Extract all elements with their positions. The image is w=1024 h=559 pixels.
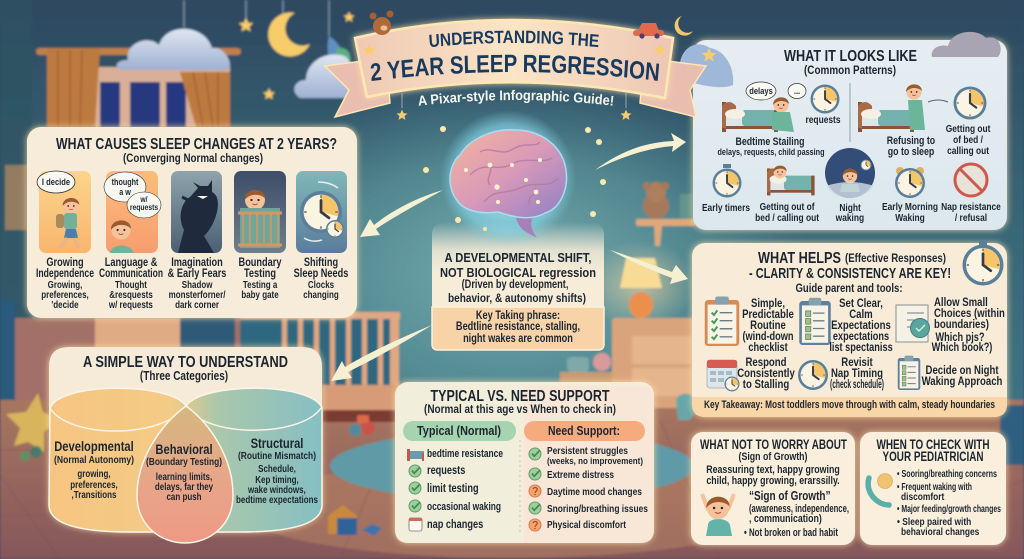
labels: Boundary [239, 257, 282, 269]
getting out of bed: Getting out of [760, 201, 815, 213]
small choices: boundaries) [934, 318, 989, 331]
structural: (Routine Mismatch) [238, 450, 316, 462]
respond consistently: Consistently [737, 367, 795, 380]
panel: what not to worry about: “Sign of Growth” [749, 490, 830, 503]
need support column [524, 421, 648, 531]
panel: what not to worry about: • Not broken or bad habit [744, 527, 838, 539]
typical column: bedtime resistance [427, 448, 503, 460]
panel: what not to worry about: (Sign of Growth) [739, 451, 807, 463]
panel: typical vs need support: TYPICAL VS. NEED SUPPORT [430, 388, 610, 405]
respond consistently [707, 356, 795, 392]
typical column [403, 421, 516, 531]
getting out of bed [755, 166, 820, 224]
title line one: UNDERSTANDING THE [429, 30, 599, 48]
bedtime stalling: ... [794, 85, 800, 96]
card: independence [37, 171, 91, 253]
icon: happy child [702, 494, 734, 536]
panel: simple way to understand: (Three Categories) [140, 370, 228, 383]
labels: w/ requests [108, 299, 153, 310]
star plush [6, 393, 60, 452]
hanging rocket [328, 36, 350, 62]
title line one [429, 30, 599, 48]
routine: Predictable [742, 308, 794, 321]
panel: brain center: night wakes are common [463, 333, 573, 345]
labels: dark corner [175, 299, 219, 310]
respond consistently: Respond [745, 356, 787, 369]
subtitle: A Pixar-style Infographic Guide! [418, 90, 614, 106]
nap timing: Nap Timing [831, 367, 883, 380]
panel: what not to worry about: , communication) [749, 513, 822, 525]
panel: what it looks like: (Common Patterns) [804, 63, 896, 77]
card: independence: I decide [42, 176, 70, 187]
panel: when to check with pediatrician: YOUR PEDIATRICIAN [882, 449, 984, 464]
small choices: Allow Small [934, 296, 988, 309]
heading: WHAT IT LOOKS LIKE [784, 48, 917, 65]
labels: preferences, [41, 289, 89, 300]
sparkles [423, 126, 606, 231]
structural: wake windows, [247, 484, 306, 495]
early timers [702, 164, 750, 214]
labels: Language & [105, 257, 158, 269]
night waking [825, 148, 875, 224]
labels: Testing a [243, 279, 278, 290]
rug [330, 430, 694, 502]
labels: 'decide [51, 299, 79, 310]
structural: Structural [251, 436, 303, 451]
icon: stopwatch [962, 240, 1004, 286]
labels: Sleep Needs [294, 268, 349, 280]
bedtime stalling: delays, requests, child passing [718, 147, 825, 158]
nap resistance: Nap resistance [941, 201, 1001, 213]
picture frame [5, 165, 27, 230]
panel: what not to worry about: (awareness, independence, [749, 503, 849, 515]
panel: what not to worry about: Reassuring text, happy growing [706, 464, 840, 476]
need support column: Need Support: [548, 423, 620, 438]
card: language: a w [119, 187, 131, 197]
small choices: Which pjs? [935, 332, 985, 344]
structural: Schedule, [258, 463, 296, 474]
cloud top right [932, 32, 1001, 57]
developmental [54, 439, 134, 500]
card: language: requests [130, 202, 158, 212]
cabinet behind [95, 318, 235, 348]
typical column: Typical (Normal) [417, 423, 501, 438]
behavioral: Behavioral [155, 442, 213, 457]
panel: brain center: Key Taking phrase: [476, 310, 560, 322]
developmental: Developmental [54, 439, 134, 454]
behavioral: can push [166, 491, 202, 502]
panel: what helps [692, 240, 1007, 417]
routine: (wind-down [742, 331, 794, 343]
window and curtains [36, 48, 241, 127]
labels: Clocks [308, 279, 334, 290]
refusing to go to sleep: Getting out [946, 123, 991, 135]
getting out of bed: bed / calling out [755, 212, 820, 224]
banner tails [325, 58, 390, 117]
labels: Communication [99, 268, 163, 280]
labels: Shifting [304, 257, 338, 269]
night waking: Night [839, 202, 862, 214]
labels: Shadow [182, 279, 213, 290]
structural [236, 436, 318, 506]
arrows from brain [331, 133, 688, 381]
night waking approach: Waking Approach [922, 375, 1002, 388]
panel: when to check with pediatrician: behavioral changes [901, 526, 979, 538]
shelf and teddy [636, 182, 696, 246]
toy shapes [349, 415, 375, 436]
panel: typical vs need support [395, 382, 654, 543]
small choices: Choices (within [934, 307, 1005, 320]
labels: & Early Fears [168, 268, 227, 280]
early timers: Early timers [702, 202, 750, 214]
bedtime stalling: Bedtime Stailing [736, 136, 804, 148]
toy blocks [328, 505, 382, 536]
typical column: occasional waking [427, 501, 501, 513]
venn left and right [49, 388, 322, 532]
refusing to go to sleep: calling out [947, 145, 990, 157]
bedtime stalling: requests [806, 114, 840, 126]
panel: brain center: NOT BIOLOGICAL regression [440, 266, 596, 280]
bedtime stalling: delays [749, 85, 773, 96]
labels: &resquests [109, 289, 153, 300]
routine: checklist [748, 342, 788, 354]
need support column: Persistent struggles [547, 445, 628, 457]
heading: WHAT CAUSES SLEEP CHANGES AT 2 YEARS? [56, 136, 337, 153]
brain icon [440, 110, 576, 246]
card: language [104, 171, 161, 253]
labels: changing [303, 289, 339, 300]
panel: typical vs need support: (Normal at this age vs When to check in) [424, 402, 616, 416]
nap timing: Revisit [841, 356, 873, 369]
need support column: Physical discomfort [547, 519, 626, 531]
panel: brain center: behavior, & autonomy shifts) [448, 293, 586, 305]
need support column: Daytime mood changes [547, 486, 642, 498]
card: boundary [234, 171, 286, 253]
routine [705, 297, 794, 354]
structural: Kep timing, [255, 474, 299, 485]
panel: what causes sleep changes [27, 127, 357, 318]
need support column: Extreme distress [547, 469, 614, 481]
refusing to go to sleep: Refusing to [887, 135, 935, 147]
panel: what not to worry about: WHAT NOT TO WORRY ABOUT [700, 437, 848, 452]
labels: Independence [36, 268, 94, 280]
nap resistance [941, 164, 1001, 224]
routine: Simple, [751, 297, 785, 310]
labels: monsterforner/ [169, 289, 226, 300]
behavioral: (Boundary Testing) [146, 456, 222, 468]
center panel fade [432, 222, 604, 350]
developmental: (Normal Autonomy) [54, 454, 134, 466]
small choices [896, 296, 1005, 354]
teddy on banner [370, 10, 394, 35]
night waking approach [898, 356, 1002, 390]
expectations [799, 297, 893, 354]
card: shifting needs [296, 171, 347, 253]
refusing to go to sleep: go to sleep [888, 146, 934, 158]
banner ribbon [355, 20, 673, 98]
typical column: limit testing [427, 483, 479, 495]
toy basket [560, 353, 612, 382]
cloud by banner [294, 55, 352, 98]
panel: what not to worry about: child, happy growing, erarssilly. [706, 475, 840, 487]
lamp and dresser [585, 240, 700, 420]
developmental: growing, [77, 468, 111, 479]
card: language: w/ [140, 194, 148, 204]
panel: brain center: (Driven by development, [462, 279, 568, 291]
panel: what not to worry about [691, 432, 855, 545]
expectations: Expectations [831, 319, 891, 332]
need support column: (weeks, no improvement) [547, 456, 643, 467]
card: fears [171, 171, 222, 253]
panel: what it looks like [680, 32, 1007, 230]
labels [36, 257, 349, 310]
respond consistently: to Stalling [743, 378, 789, 391]
balls [20, 446, 42, 461]
night waking approach: Decide on Night [926, 364, 999, 377]
behavioral: learning limits, [156, 471, 212, 482]
panel: when to check with pediatrician: • Frequent waking with [897, 482, 972, 493]
panel: what helps: (Effective Responses) [845, 251, 946, 265]
early morning waking [882, 167, 938, 224]
car on banner [633, 23, 664, 39]
routine: Routine [750, 319, 786, 332]
behavioral: delays, far they [155, 481, 213, 492]
typical column: nap changes [427, 519, 483, 531]
title banner [324, 10, 708, 120]
venn center egg [137, 406, 233, 543]
title line two: 2 YEAR SLEEP REGRESSION [370, 54, 660, 81]
nap timing [798, 356, 884, 391]
panel: what helps: - CLARITY & CONSISTENCY ARE KEY! [749, 265, 951, 282]
expectations: Set Clear, [839, 297, 883, 310]
small choices: Which book?) [932, 342, 992, 354]
expectations: list spectaniss [829, 342, 893, 354]
nap resistance: / refusal [955, 212, 987, 224]
labels: Growing [46, 257, 84, 269]
panel: simple way to understand [49, 347, 322, 543]
bedtime stalling [718, 82, 840, 158]
nap timing: (check schedule) [830, 379, 884, 391]
panel: brain center [423, 110, 606, 350]
icon: phone [868, 474, 892, 505]
night waking: waking [835, 212, 864, 224]
panel: when to check with pediatrician [860, 432, 1006, 545]
labels: Growing, [48, 279, 82, 290]
behavioral [146, 442, 222, 502]
panel: what causes sleep changes: (Converging Normal changes) [123, 153, 263, 165]
panel: what helps: Guide parent and tools: [796, 281, 902, 295]
hanging cloud left [117, 0, 230, 70]
structural: bedtime expectations [236, 495, 318, 506]
labels: Thought [115, 279, 147, 290]
refusing to go to sleep [858, 84, 991, 158]
title line two [370, 54, 660, 81]
developmental: ,Transitions [72, 489, 116, 500]
panel: brain center: Bedtline resistance, stalling, [456, 321, 580, 333]
panel: when to check with pediatrician: discomfort [901, 491, 945, 503]
decorative cloud with star [680, 44, 733, 87]
labels: baby gate [241, 289, 279, 300]
refusing to go to sleep: of bed / [953, 134, 983, 146]
heading: WHAT HELPS [758, 250, 841, 267]
expectations: Calm [849, 308, 873, 321]
card: language: thought [112, 177, 139, 187]
panel: when to check with pediatrician: • Sleep paired with [897, 516, 971, 528]
need support column: Snoring/breathing issues [547, 503, 648, 515]
panel: brain center: A DEVELOPMENTAL SHIFT, [444, 251, 592, 265]
labels: Imagination [171, 257, 223, 269]
early morning waking: Waking [895, 212, 925, 224]
crib [240, 312, 400, 422]
hanging moon [239, 0, 354, 99]
heading: A SIMPLE WAY TO UNDERSTAND [83, 354, 288, 371]
developmental: preferences, [70, 479, 118, 490]
labels: Testing [244, 268, 276, 280]
expectations: expectations [833, 331, 889, 343]
early morning waking: Early Morning [882, 201, 938, 213]
typical column: requests [427, 465, 466, 477]
